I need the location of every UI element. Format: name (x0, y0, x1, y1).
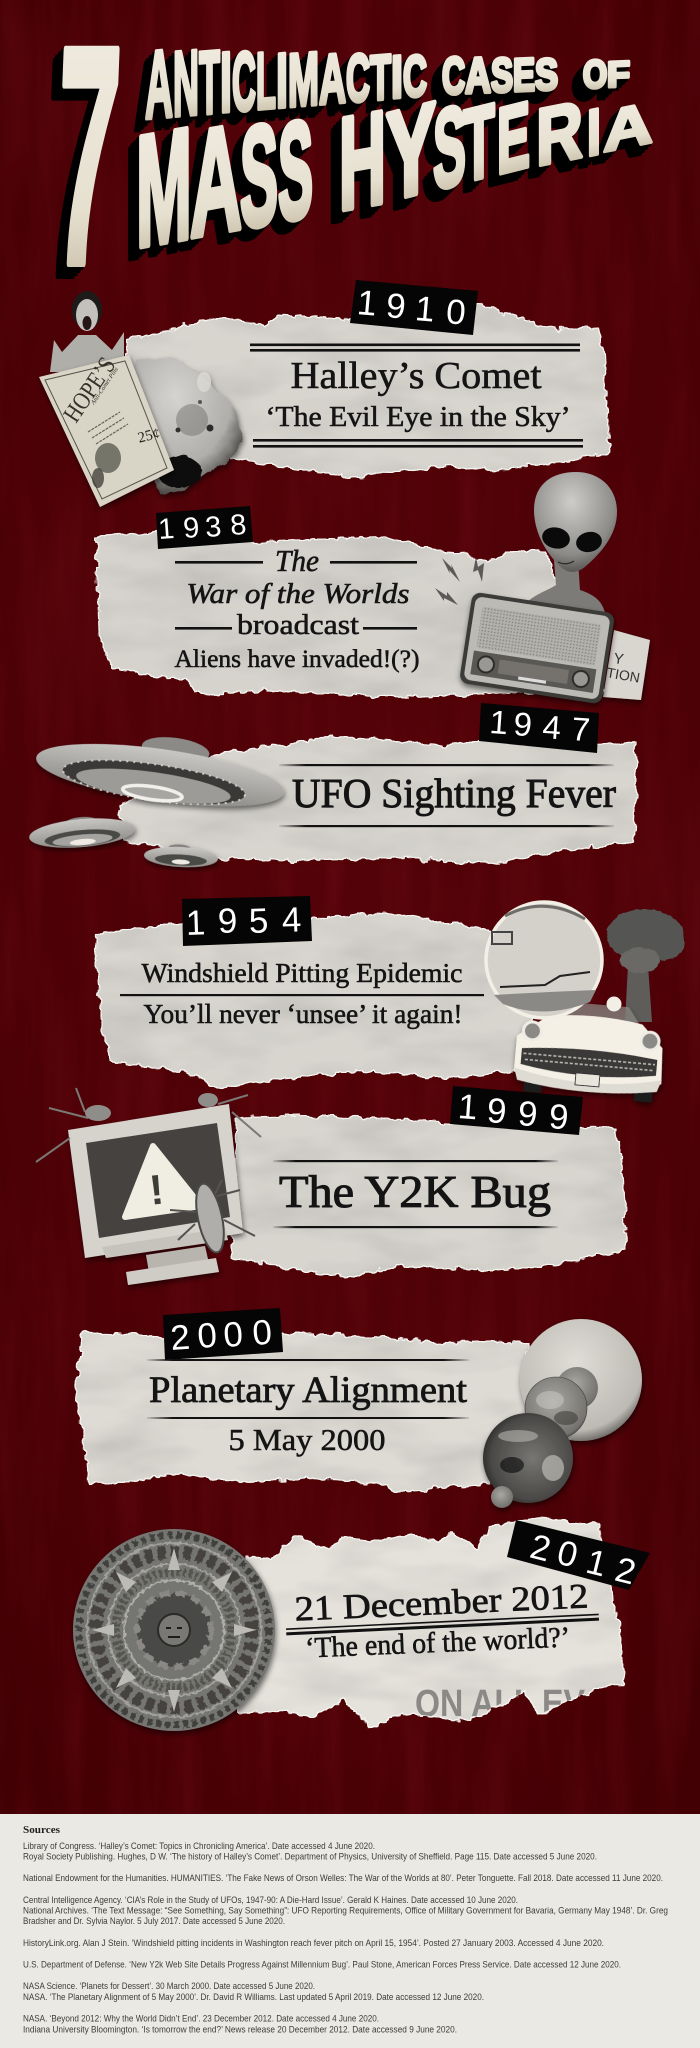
source list: Bradsher and Dr. Sylvia Naylor. 5 July 2017. Date accessed 5 June 2020. (23, 1915, 285, 1926)
torn newspaper strip (97, 532, 603, 697)
icon: medium flying saucer (28, 812, 136, 852)
panel: 1999 The Y2K Bug (36, 1086, 625, 1285)
title line: Anticlimactic Cases of: T (199, 33, 220, 134)
heading: Planetary Alignment: Planetary Alignment (149, 1370, 468, 1411)
source list: Royal Society Publishing. Hughes, D W. ‘The history of Halley’s Comet’. Department of Physics, University of Sheffield. Page 115. Date accessed 5 June 2020. (23, 1850, 597, 1862)
title line: Anticlimactic Cases of: S (491, 48, 513, 102)
title line: Mass Hysteria: E (497, 81, 530, 194)
title line: Anticlimactic Cases of: N (173, 31, 199, 136)
source list: Library of Congress. ‘Halley’s Comet: Topics in Chronicling America’. Date accessed 4 June 2020. (23, 1840, 375, 1851)
title line: Anticlimactic Cases of: M (288, 36, 319, 123)
icon: aligned planets (483, 1319, 642, 1508)
heading: The War of the Worlds broadcast: War of the Worlds (186, 579, 410, 610)
double rule top (250, 344, 580, 352)
icon: mushroom cloud (607, 909, 685, 1022)
source list: NASA Science. ‘Planets for Dessert’. 30 March 2000. Date accessed 5 June 2020. (23, 1980, 315, 1991)
subheading: Aliens have invaded!(?) (174, 646, 420, 673)
rule top (279, 764, 614, 766)
heading: UFO Sighting Fever: UFO Sighting Fever (292, 770, 616, 816)
title line: Anticlimactic Cases of: C (403, 44, 427, 110)
rule bottom (273, 1226, 558, 1228)
icon: large flying saucer (33, 719, 289, 818)
icon: comet rock (135, 358, 243, 495)
double rule bottom (253, 439, 583, 448)
title line: Anticlimactic Cases of: A (465, 48, 491, 104)
title line: Anticlimactic Cases of: E (513, 50, 535, 101)
heading: Windshield Pitting Epidemic: Windshield Pitting Epidemic (142, 958, 463, 988)
title line: Anticlimactic Cases of: C (346, 41, 370, 117)
panel: 1938 War of the Worlds (97, 472, 650, 704)
torn newspaper strip (237, 1518, 623, 1727)
title line: Anticlimactic Cases of (145, 30, 630, 139)
icon: lightning bolts (435, 557, 484, 605)
icon: grey alien (522, 472, 617, 620)
title line: Anticlimactic Cases of: I (220, 35, 232, 131)
icon: Hope's Anti-Comet Pills poster: HOPE’S (59, 353, 121, 427)
title line: Mass Hysteria: A (190, 93, 242, 270)
torn clipping behind radio (603, 630, 650, 700)
title line: Anticlimactic Cases of: C (442, 47, 465, 106)
icon: small flying saucer (144, 843, 219, 869)
panel: 1954 Windshield Pitting Epidemic (96, 896, 685, 1103)
title line: Mass Hysteria: I (587, 95, 601, 170)
title line: Mass Hysteria (136, 76, 653, 281)
source list: HistoryLink.org. Alan J Stein. ‘Windshield pitting incidents in Washington reach fever pitch on April 15, 1954’. Posted 27 January 2003. Accessed 4 June 2020. (23, 1937, 604, 1948)
title line: Anticlimactic Cases of: O (583, 53, 607, 97)
year tag 1947: 1947 (488, 703, 591, 748)
title line: Mass Hysteria: S (433, 81, 466, 214)
torn newspaper strip (127, 305, 609, 477)
year tag 1999: 1999 (457, 1087, 570, 1137)
title line: Mass Hysteria: M (136, 94, 192, 281)
icon: crt monitor with warning: ! (147, 1165, 166, 1214)
title line: Anticlimactic Cases of: I (391, 44, 403, 112)
year tag 1954: 1954 (185, 900, 302, 943)
panel: sources (0, 1814, 700, 2048)
panel: 2012 End of the world (73, 1518, 650, 1731)
title line: Anticlimactic Cases of: I (276, 39, 288, 125)
panel: 1947 UFO Sighting Fever (28, 703, 636, 869)
icon: vintage radio (459, 592, 615, 704)
title line: Anticlimactic Cases of: A (319, 38, 346, 119)
year tag 1910: 1910 (356, 283, 467, 333)
title (49, 0, 653, 329)
year tag 1938: 1938 (157, 509, 248, 546)
title line: Anticlimactic Cases of: A (145, 30, 173, 139)
title line: Anticlimactic Cases of: T (370, 41, 391, 114)
source list: NASA. ‘Beyond 2012: Why the World Didn’t End’. 23 December 2012. Date accessed 4 June 2020. (23, 2012, 379, 2024)
icon: bugs on the monitor (36, 1088, 261, 1255)
title line: Anticlimactic Cases of: L (256, 35, 276, 126)
heading: The Y2K Bug: The Y2K Bug (279, 1167, 551, 1217)
year tag 2012: 2012 (526, 1527, 640, 1592)
title line: Mass Hysteria: H (339, 83, 386, 238)
torn newspaper strip (76, 1333, 530, 1492)
heading: The War of the Worlds broadcast: The (275, 543, 319, 578)
title line: Mass Hysteria: S (240, 93, 278, 258)
source list: Central Intelligence Agency. ‘CIA’s Role in the Study of UFOs, 1947-90: A Die-Hard Issue’. Gerald K Haines. Date accessed 10 June 2020. (23, 1894, 518, 1905)
double rule (286, 1614, 599, 1635)
source list (23, 1840, 668, 2034)
title line: Mass Hysteria: R (536, 83, 583, 184)
heading: Halley's Comet: Halley’s Comet (290, 355, 542, 397)
heading: 21 December 2012: 21 December 2012 (294, 1576, 589, 1629)
torn newspaper strip (232, 1117, 625, 1277)
rule top (273, 1160, 558, 1162)
icon: magnifier showing pitted windshield (486, 902, 622, 1018)
heading: sources: Sources (23, 1824, 61, 1836)
rule bottom (147, 1417, 469, 1419)
rule bottom (279, 825, 614, 827)
icon: Hope's Anti-Comet Pills poster: Anti-Comet Pills (89, 366, 120, 407)
title line: Anticlimactic Cases of: C (232, 36, 256, 129)
torn clipping behind radio: Y (612, 650, 625, 668)
panel: 2000 Planetary Alignment (76, 1308, 642, 1508)
subheading: You’ll never ‘unsee’ it again! (144, 999, 462, 1029)
heading: The War of the Worlds broadcast: broadcast (237, 610, 359, 641)
subheading: ‘The Evil Eye in the Sky’ (266, 402, 570, 433)
year tag 2000: 2000 (169, 1313, 273, 1358)
icon: Hope's Anti-Comet Pills poster: 25¢ (136, 426, 162, 447)
title line: Mass Hysteria: S (278, 92, 313, 251)
icon: screaming woman (50, 291, 124, 372)
title line: Mass Hysteria: Y (386, 76, 436, 229)
title line: Mass Hysteria: A (603, 90, 653, 165)
source list: Indiana University Bloomington. ‘Is tomorrow the end?’ News release 20 December 2012. Date accessed 9 June 2020. (23, 2024, 457, 2034)
icon: Aztec calendar stone (73, 1529, 275, 1731)
subheading: 5 May 2000 (228, 1422, 386, 1457)
panel: 1910 Halley's Comet (39, 280, 609, 507)
icon: Hope's Anti-Comet Pills poster (39, 353, 174, 507)
rule (120, 994, 484, 996)
faded newspaper headline: ON ALL EV (415, 1683, 586, 1725)
subheading: ‘The end of the world?’ (305, 1621, 571, 1665)
rule top (147, 1359, 469, 1361)
title line: Anticlimactic Cases of: F (607, 54, 630, 95)
title line: Mass Hysteria: T (463, 83, 495, 205)
torn newspaper strip (96, 913, 540, 1088)
source list: U.S. Department of Defense. ‘New Y2k Web Site Details Progress Against Millennium Bug’. Paul Stone, American Forces Press Service. Date accessed 12 June 2020. (23, 1958, 621, 1970)
icon: crt monitor with warning (68, 1104, 243, 1285)
torn newspaper strip (120, 737, 636, 863)
torn clipping behind radio: TION (605, 664, 641, 686)
source list: NASA. ‘The Planetary Alignment of 5 May 2000’. Dr. David R Williams. Last updated 5 April 2019. Date accessed 12 June 2020. (23, 1991, 484, 2002)
icon: vintage car (512, 998, 668, 1103)
heading: The War of the Worlds broadcast (175, 543, 417, 641)
title line: Anticlimactic Cases of: S (535, 50, 558, 100)
